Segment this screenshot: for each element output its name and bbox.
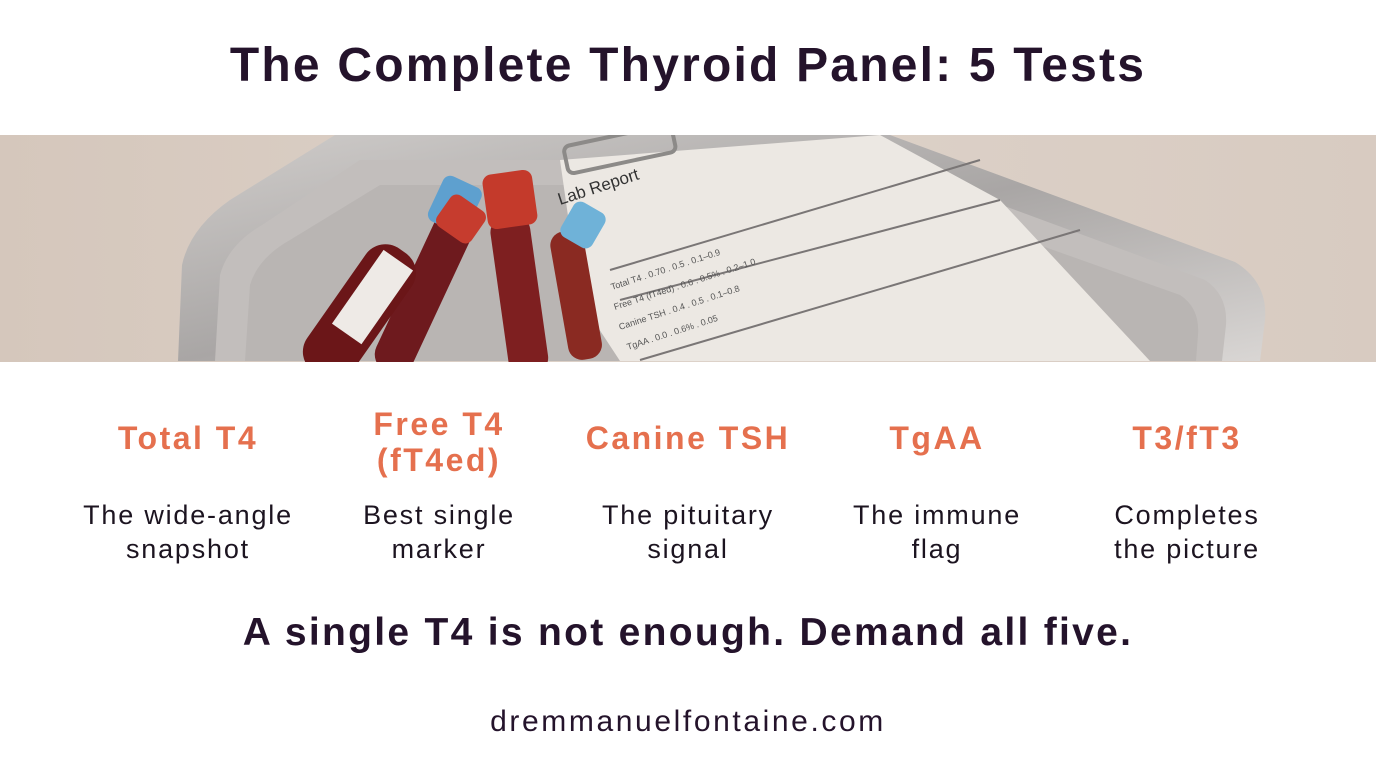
photo: lab tray with tubes and report xyxy=(0,135,1376,362)
lab report paper: Lab Report xyxy=(555,165,641,209)
test 2: Free T4 xyxy=(363,406,515,564)
test 5: T3/fT3: T3/fT3 xyxy=(1132,420,1242,456)
test 3: Canine TSH: Canine TSH xyxy=(586,420,790,456)
blood tubes xyxy=(293,169,609,390)
title: The Complete Thyroid Panel: 5 Tests xyxy=(230,39,1146,92)
test 4: TgAA: flag xyxy=(912,534,962,564)
test 2: Free T4: Free T4 xyxy=(373,406,505,442)
test 3: Canine TSH: The pituitary xyxy=(602,500,774,530)
test 4: TgAA xyxy=(853,420,1021,564)
test 5: T3/fT3: Completes xyxy=(1114,500,1260,530)
test 3: Canine TSH: signal xyxy=(647,534,729,564)
test 2: Free T4: Best single xyxy=(363,500,515,530)
lab report paper xyxy=(555,124,1150,361)
lab report paper: TgAA . 0.0 . 0.6% . 0.05 xyxy=(626,313,719,352)
lab report paper: Total T4 . 0.70 . 0.5 . 0.1–0.9 xyxy=(610,247,721,292)
tray xyxy=(178,135,1265,361)
test 1: Total T4: snapshot xyxy=(126,534,250,564)
test 4: TgAA: TgAA xyxy=(889,420,985,456)
test 2: Free T4: marker xyxy=(392,534,486,564)
website url: dremmanuelfontaine.com xyxy=(490,705,886,738)
test 1: Total T4 xyxy=(83,420,293,564)
test 4: TgAA: The immune xyxy=(853,500,1021,530)
test 5: T3/fT3: the picture xyxy=(1114,534,1260,564)
test 1: Total T4: The wide-angle xyxy=(83,500,293,530)
test 3: Canine TSH xyxy=(586,420,790,564)
test 2: Free T4: (fT4ed) xyxy=(377,442,501,478)
test 1: Total T4: Total T4 xyxy=(118,420,258,456)
test 5: T3/fT3 xyxy=(1114,420,1260,564)
call to action: A single T4 is not enough. Demand all five. xyxy=(243,611,1133,654)
lab report paper: Free T4 (fT4ed) . 0.6 . 0.5% . 0.2–1.0 xyxy=(613,257,757,312)
lab report paper: Canine TSH . 0.4 . 0.5 . 0.1–0.8 xyxy=(618,283,741,332)
